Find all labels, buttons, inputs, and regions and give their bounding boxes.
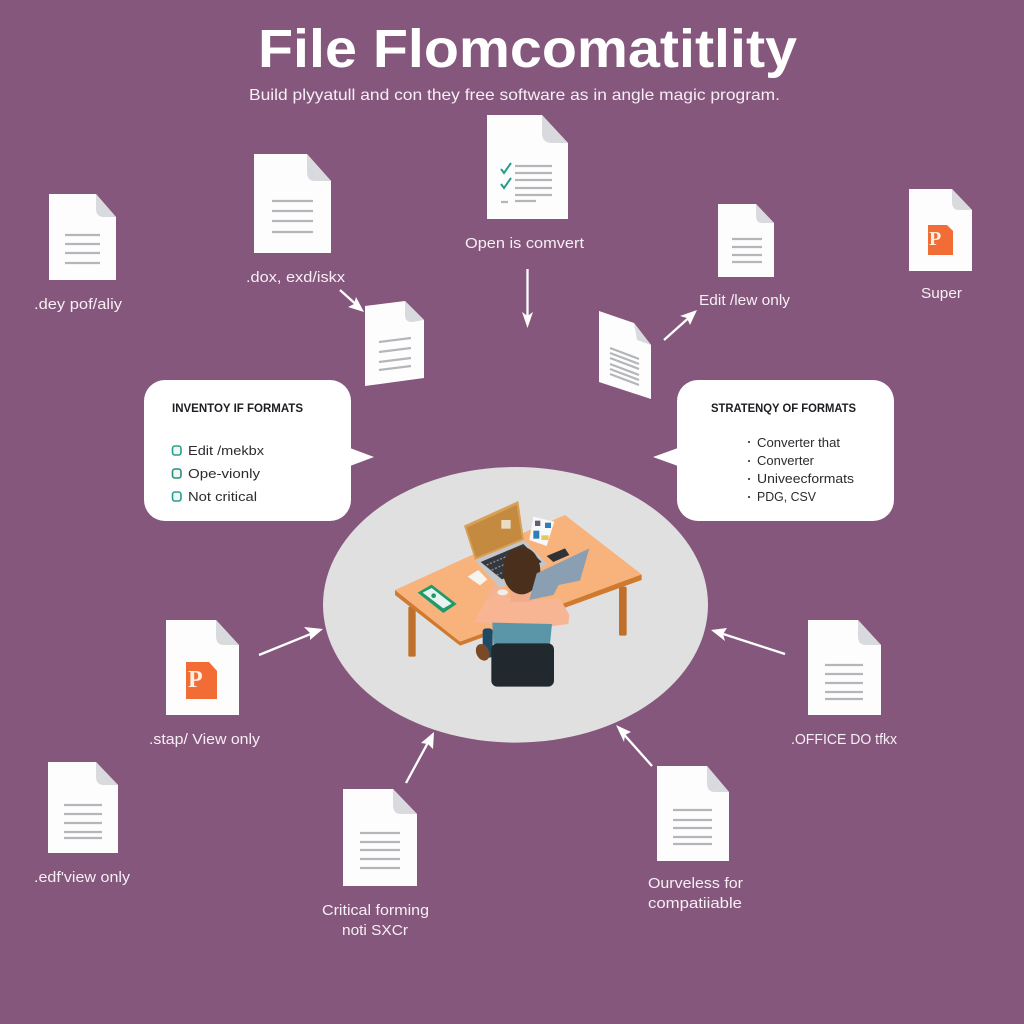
icon: right document (718, 204, 774, 277)
arrow: down from top document (522, 269, 533, 328)
label: bottom left document: .edf'view only (34, 869, 131, 886)
note paper (468, 570, 487, 585)
label: open is convert: Open is comvert (465, 235, 585, 252)
torso shoulders (474, 597, 569, 626)
head hair (503, 547, 540, 594)
heading: inventory: INVENTOY IF FORMATS (172, 401, 303, 415)
list: inventory items (172, 443, 265, 504)
label: far right document: Super (921, 285, 962, 302)
watch cuff (497, 589, 508, 595)
arrow: to tilted document (340, 290, 364, 312)
arrow: bottom middle right to desk (616, 725, 652, 766)
chair (491, 643, 554, 687)
desk (395, 515, 642, 646)
arrow: to edit view label (664, 310, 697, 340)
list: strategy items: Converter (757, 453, 815, 468)
icon: top centre checklist document (487, 115, 568, 219)
shirt (492, 623, 552, 644)
icon: tilted left document (365, 301, 424, 386)
label: right document: Edit /lew only (699, 292, 791, 309)
label: bottom middle left document (322, 902, 429, 939)
trousers (483, 628, 493, 658)
desk legs (408, 587, 627, 657)
icon: far right presentation document (909, 189, 972, 271)
panel: strategy of formats (653, 380, 894, 521)
arrow: lower left to desk (259, 627, 323, 655)
list: strategy items: Converter that (757, 435, 840, 450)
label: bottom middle right document (648, 875, 743, 912)
icon: bottom left document (48, 762, 118, 853)
label: lower left document: .stap/ View only (149, 731, 261, 748)
icon: lower left presentation document: P (188, 667, 203, 693)
arrow: lower right to desk (711, 628, 785, 654)
icon: far right presentation document: P (929, 228, 941, 250)
icon: bottom middle left document (343, 789, 417, 886)
list: inventory items: Edit /mekbx (188, 443, 265, 458)
label: bottom middle right document: compatiiable (648, 895, 742, 912)
list: strategy items (748, 435, 855, 504)
green tablet (418, 585, 457, 613)
icon: tilted right document (599, 311, 651, 399)
list: strategy items: PDG, CSV (757, 489, 816, 504)
label: bottom middle left document: noti SXCr (342, 922, 408, 939)
hands and forearm (485, 585, 508, 602)
document card on desk (529, 517, 554, 546)
label: upper left document: .dox, exd/iskx (246, 269, 346, 286)
icon: bottom middle right document (657, 766, 729, 861)
panel: inventory of formats (144, 380, 374, 521)
icon: upper left document (254, 154, 331, 253)
label: bottom middle right document: Ourveless for (648, 875, 743, 892)
list: strategy items: Univeecformats (757, 471, 855, 486)
central ellipse (323, 467, 708, 743)
heading: strategy: STRATENQY OF FORMATS (711, 401, 856, 415)
grey folder (529, 548, 589, 600)
list: inventory items: Ope-vionly (188, 466, 261, 481)
arrow: bottom middle left to desk (406, 732, 434, 783)
shoe (473, 642, 492, 663)
icon: lower right document (808, 620, 881, 715)
icon: lower left presentation document (166, 620, 239, 715)
label: bottom middle left document: Critical forming (322, 902, 429, 919)
icon: far left document (49, 194, 116, 280)
label: far left document: .dey pof/aliy (34, 296, 123, 313)
title: File Flomcomatitlity (258, 19, 797, 79)
neck (511, 585, 531, 602)
laptop (464, 501, 547, 588)
illustration: person working at desk (395, 501, 642, 687)
phone (547, 548, 569, 562)
label: lower right document: .OFFICE DO tfkx (791, 731, 897, 748)
subtitle: Build plyyatull and con they free software as in angle magic program. (249, 87, 780, 104)
list: inventory items: Not critical (188, 489, 257, 504)
